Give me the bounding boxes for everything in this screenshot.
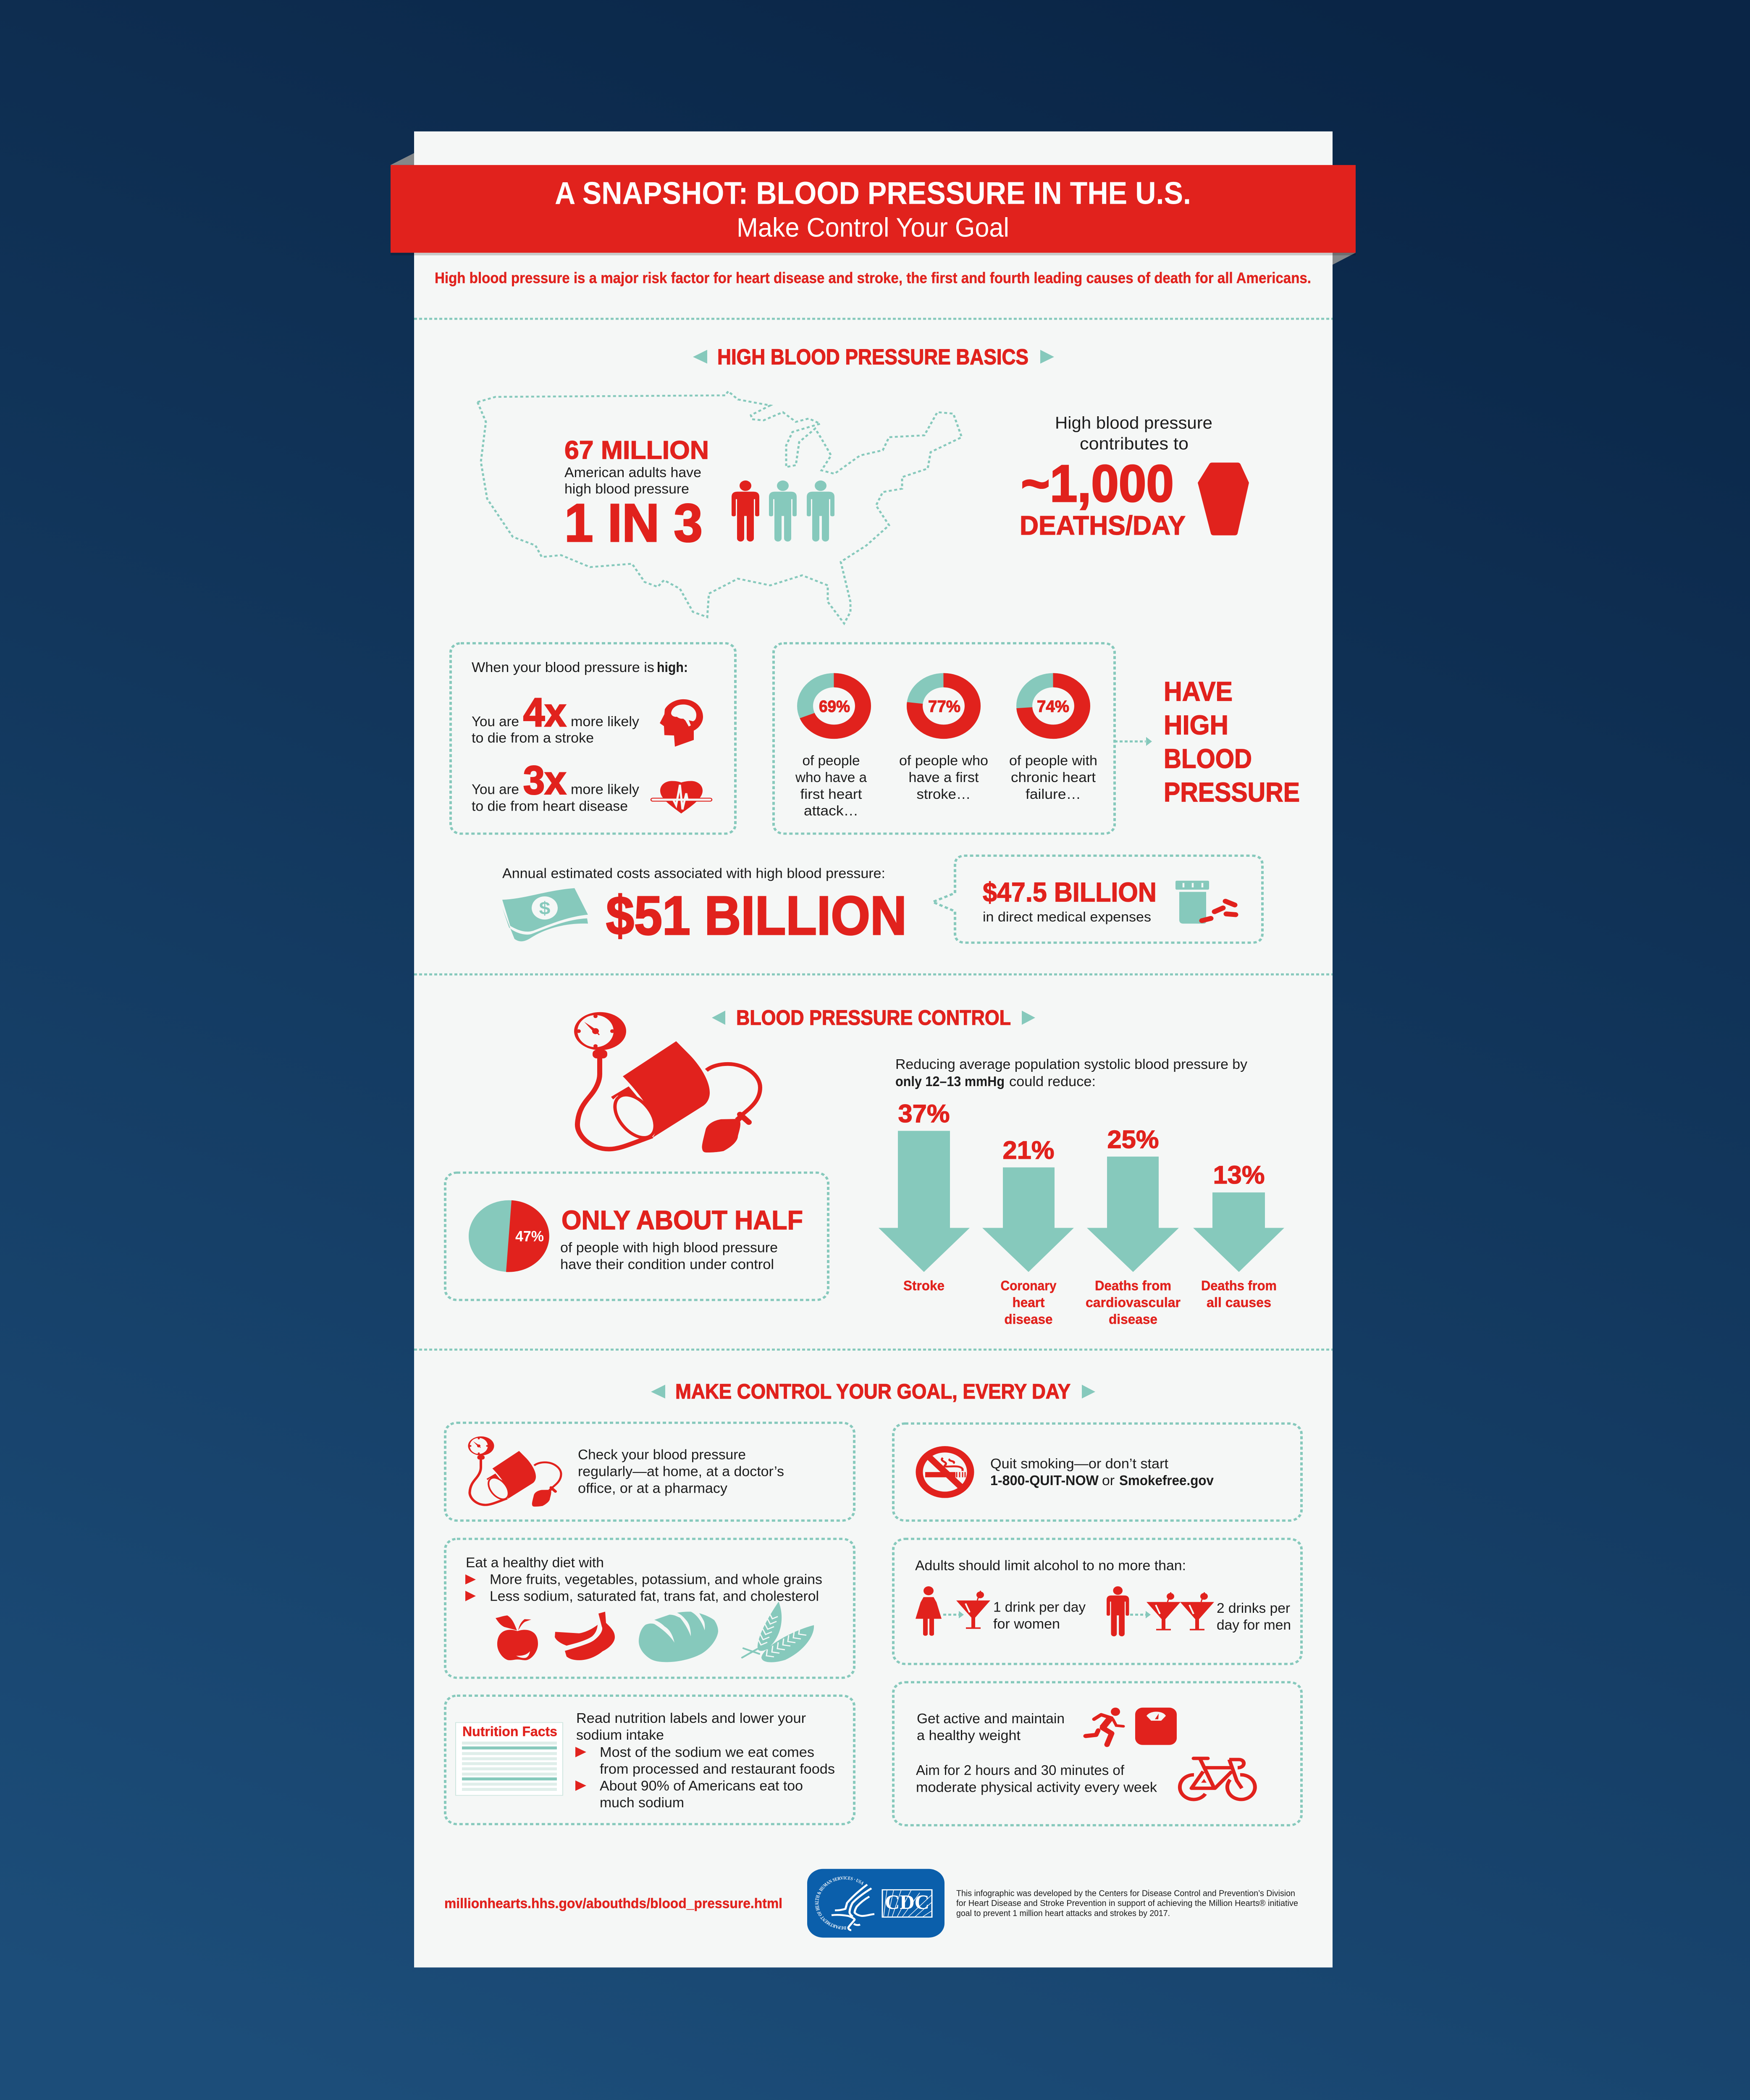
icon: money: $ [539,898,550,918]
text: reducing systolic pressure: Reducing average population systolic blood pressure by [895,1056,1247,1072]
stat: 3x heart disease: to die from heart disease [472,798,628,814]
caption: first stroke: have a first [909,769,979,785]
text: have high blood pressure: PRESSURE [1164,777,1300,808]
stat: 4x stroke: 4x [523,690,566,735]
intro text: High blood pressure is a major risk factor for heart disease and stroke, the first and fourth leading causes of death for all Americans. [435,270,1311,286]
text: have high blood pressure: HIGH [1164,709,1228,740]
logo: HHS and CDC: DEPARTMENT OF HEALTH & HUMAN SERVICES · USA [813,1875,865,1931]
footer: credit text: for Heart Disease and Stroke Prevention in support of achieving the Million Hearts® initiative [956,1898,1298,1908]
stat: 4x stroke: to die from a stroke [472,730,594,746]
arrow: to have high blood pressure [1115,737,1152,746]
caption: first stroke [899,752,988,802]
arrow chart: coronary heart disease 21% [982,1136,1074,1327]
stat: 4x stroke [472,690,639,746]
icon: blood pressure monitor [574,1012,760,1152]
caption: heart attack: first heart [800,786,862,802]
caption: heart attack: who have a [795,769,867,785]
panel: limit alcohol: for women [993,1615,1060,1632]
section: high blood pressure basics [451,345,1300,946]
panel: healthy diet: Eat a healthy diet with [466,1554,604,1570]
icon: three people [732,480,834,541]
section: blood pressure control [445,1006,1284,1327]
icon: runner [1086,1708,1123,1745]
arrow chart: stroke 37% [879,1100,970,1294]
arrow chart: all causes 13%: all causes [1207,1295,1271,1310]
icon: nutrition facts label: Nutrition Facts [462,1724,557,1739]
main panel [414,131,1333,1967]
panel: nutrition labels: Most of the sodium we eat comes [600,1744,814,1760]
caption: first stroke: of people who [899,752,988,769]
callout: direct medical expenses: in direct medical expenses [983,910,1151,924]
logo: HHS and CDC: CDC [885,1891,929,1914]
arrow chart: cardiovascular deaths 25%: disease [1109,1312,1157,1327]
text: reducing systolic pressure: could reduce: [1009,1073,1096,1089]
icon: money [502,888,588,941]
icon: wheat [742,1601,814,1662]
icon: head with brain [660,699,703,747]
icon: apple [496,1615,538,1660]
stat: 67 million: high blood pressure [564,480,689,497]
panel: limit alcohol: 1 drink per day [993,1599,1086,1615]
panel: quit smoking: Quit smoking—or don’t start [990,1455,1168,1472]
arrow chart: stroke 37%: 37% [898,1100,950,1128]
panel: nutrition labels: Read nutrition labels and lower your [576,1710,806,1726]
icon: small monitor [468,1436,561,1507]
panel: nutrition labels: much sodium [600,1794,684,1811]
text: have high blood pressure [1164,676,1300,808]
banner [391,153,1356,265]
arrow: man to drinks [1130,1611,1151,1618]
arrow chart: cardiovascular deaths 25% [1086,1125,1181,1327]
text: have high blood pressure: HAVE [1164,676,1233,707]
stat: 3x heart disease: 3x [523,758,566,803]
stat: deaths per day: ~1,000 [1021,454,1174,513]
title: A SNAPSHOT: BLOOD PRESSURE IN THE U.S. [555,176,1191,211]
panel: nutrition labels: from processed and restaurant foods [600,1761,835,1777]
icon: heart with pulse [651,781,712,814]
arrow chart: coronary heart disease 21%: 21% [1002,1136,1054,1164]
panel: only about half [445,1173,828,1300]
panel: get active: Get active and maintain [917,1710,1065,1727]
arrow chart: all causes 13%: 13% [1213,1160,1265,1189]
arrow chart: coronary heart disease 21%: disease [1005,1312,1052,1327]
stat: 67 million: 67 MILLION [564,436,709,465]
panel: stroke and heart disease risk: When your blood pressure is [472,660,654,675]
pie chart: 47%: 47% [515,1228,544,1245]
stat: 67 million: American adults have [564,464,701,480]
stat: deaths per day: DEATHS/DAY [1020,511,1186,541]
donut: 77%: 77% [928,697,960,716]
text: have high blood pressure: BLOOD [1164,743,1252,774]
caption: heart failure [1009,752,1097,802]
donut: 69%: 69% [819,697,850,716]
icon: no smoking [919,1449,971,1495]
icon: nutrition facts label [456,1722,563,1796]
arrow chart: coronary heart disease 21%: Coronary [1000,1278,1057,1294]
donut: 77% [915,680,973,732]
panel: limit alcohol [893,1539,1301,1664]
caption: heart failure: failure… [1026,786,1081,802]
panel: donut charts [774,643,1115,834]
panel: check blood pressure: regularly—at home, at a doctor’s [578,1463,784,1479]
panel: get active: Aim for 2 hours and 30 minutes of [916,1762,1125,1778]
stat: deaths per day: contributes to [1080,435,1189,454]
caption: heart attack: of people [802,752,860,769]
panel: healthy diet [445,1539,854,1678]
panel: healthy diet: Less sodium, saturated fat, trans fat, and cholesterol [490,1588,819,1604]
icon: pill bottle [1175,881,1236,924]
logo: HHS and CDC [807,1869,945,1937]
panel: limit alcohol: 2 drinks per [1217,1600,1290,1616]
footer: credit text [956,1888,1298,1918]
text: reducing systolic pressure [895,1056,1247,1089]
stat: deaths per day [1020,414,1212,541]
caption: heart attack: attack… [804,802,858,819]
stat: 67 million: 1 IN 3 [564,493,703,553]
panel: only about half: ONLY ABOUT HALF [561,1205,803,1235]
callout: direct medical expenses [933,856,1262,942]
panel: only about half: have their condition under control [560,1256,774,1272]
footer: credit text: This infographic was developed by the Centers for Disease Control and Prevention’s Division [956,1888,1295,1898]
stat: deaths per day: High blood pressure [1055,414,1212,433]
pie chart: 47% [469,1200,549,1272]
donut: 69% [805,680,863,732]
panel: get active [893,1682,1301,1825]
stat: 3x heart disease [472,758,639,814]
arrow chart: all causes 13% [1193,1160,1284,1310]
panel: limit alcohol: day for men [1217,1617,1291,1633]
panel: limit alcohol: Adults should limit alcohol to no more than: [915,1557,1186,1573]
icon: two martinis [1147,1592,1214,1630]
caption: first stroke: stroke… [916,786,971,802]
footer: credit text: goal to prevent 1 million heart attacks and strokes by 2017. [956,1908,1170,1918]
stat: 67 million [564,436,709,553]
panel: stroke and heart disease risk: high: [657,660,688,675]
text: annual costs: Annual estimated costs associated with high blood pressure: [502,865,885,881]
stat: 51 billion: $51 BILLION [606,885,907,946]
panel: stroke and heart disease risk [451,643,735,834]
arrow chart: all causes 13%: Deaths from [1201,1278,1277,1294]
stat: 3x heart disease: more likely [571,781,639,797]
heading: control: BLOOD PRESSURE CONTROL [736,1006,1011,1029]
stat: 4x stroke: more likely [571,713,639,729]
heading: goal: MAKE CONTROL YOUR GOAL, EVERY DAY [675,1380,1070,1403]
panel: nutrition labels: About 90% of Americans eat too [600,1777,803,1794]
icon: coffin [1198,462,1249,536]
panel: nutrition labels [445,1696,854,1824]
panel: healthy diet: More fruits, vegetables, potassium, and whole grains [490,1571,822,1587]
panel: only about half: of people with high blood pressure [560,1239,778,1255]
subtitle: Make Control Your Goal [737,213,1009,243]
section: make control your goal [445,1380,1301,1825]
panel: get active: a healthy weight [917,1727,1021,1743]
icon: bicycle [1180,1759,1255,1799]
icon: man [1107,1586,1129,1636]
footer: url: millionhearts.hhs.gov/abouthds/blood_pressure.html [444,1895,782,1911]
icon: scale [1135,1708,1177,1745]
panel: check blood pressure [445,1423,854,1520]
arrow: woman to drink [943,1611,964,1618]
text: reducing systolic pressure: only 12–13 mmHg [895,1073,1005,1089]
panel: check blood pressure: office, or at a pharmacy [578,1480,727,1496]
icon: bread [639,1612,718,1662]
panel: check blood pressure: Check your blood pressure [578,1446,746,1462]
icon: martini [956,1591,990,1629]
caption: heart attack [795,752,867,819]
panel: quit smoking: 1-800-QUIT-NOW [990,1472,1099,1488]
icon: woman [916,1586,942,1636]
arrow chart: stroke 37%: Stroke [903,1278,945,1294]
donut: 74%: 74% [1037,697,1069,716]
panel: quit smoking [893,1423,1301,1520]
caption: heart failure: chronic heart [1011,769,1096,785]
stat: 4x stroke: You are [472,713,519,729]
panel: nutrition labels: sodium intake [576,1727,664,1743]
arrow chart: coronary heart disease 21%: heart [1012,1295,1044,1310]
callout: direct medical expenses: $47.5 BILLION [983,877,1157,908]
donut: 74% [1024,680,1082,732]
heading: basics: HIGH BLOOD PRESSURE BASICS [717,345,1028,369]
panel: get active: moderate physical activity every week [916,1779,1157,1795]
panel: quit smoking: or [1102,1472,1115,1488]
arrow chart: cardiovascular deaths 25%: Deaths from [1095,1278,1171,1294]
stat: 3x heart disease: You are [472,781,519,797]
map: dotted outline of the U.S. [478,391,962,623]
arrow chart: cardiovascular deaths 25%: 25% [1107,1125,1159,1153]
icon: banana [555,1612,615,1660]
panel: quit smoking: Smokefree.gov [1119,1472,1214,1488]
arrow chart: cardiovascular deaths 25%: cardiovascular [1086,1295,1181,1310]
caption: heart failure: of people with [1009,752,1097,769]
